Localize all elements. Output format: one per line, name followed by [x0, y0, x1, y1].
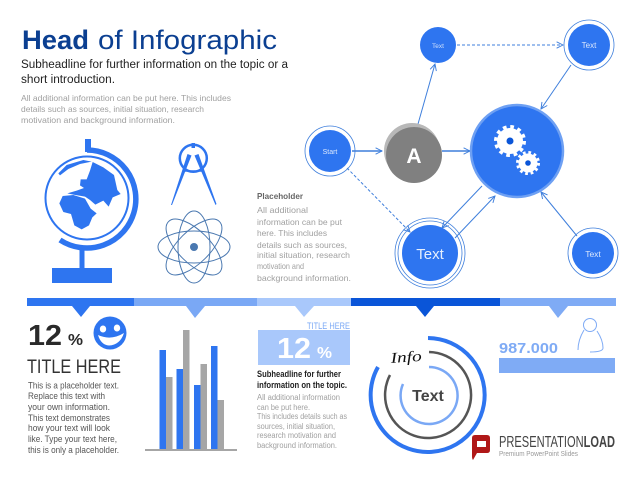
node: big text: Text — [416, 246, 445, 263]
concentric ring chart: Text — [412, 388, 445, 405]
placeholder text block — [257, 191, 351, 283]
intro text block — [21, 93, 231, 125]
title — [22, 25, 277, 55]
placeholder text block: Placeholder — [257, 191, 304, 201]
node: start: Start — [323, 149, 337, 156]
node: bottom right text: Text — [585, 249, 601, 259]
node: top text: Text — [432, 43, 444, 50]
additional information text: can be put here. — [257, 403, 310, 412]
node: gears — [471, 105, 563, 197]
node: top right text: Text — [582, 41, 597, 50]
node: top text — [420, 27, 456, 63]
placeholder body text: This text demonstrates — [28, 413, 110, 424]
logo tagline: Premium PowerPoint Slides — [499, 451, 578, 458]
title: Head — [22, 25, 89, 55]
placeholder body text: This is a placeholder text. — [28, 380, 119, 392]
handwritten label: info: Info — [389, 349, 423, 367]
node: A: A — [406, 145, 422, 168]
logo: presentationload — [472, 434, 615, 460]
concentric ring chart — [371, 338, 485, 452]
intro text block: motivation and background information. — [21, 115, 175, 125]
node: A — [384, 123, 442, 183]
subheadline: further information: Subheadline for further — [257, 369, 341, 379]
arrows — [347, 45, 577, 238]
placeholder text block: motivation and — [257, 261, 304, 271]
segmented divider bar — [27, 298, 616, 318]
placeholder body text — [28, 380, 119, 456]
additional information text — [257, 393, 347, 450]
heading: title here (light): TITLE HERE — [307, 321, 350, 332]
stat: 987.000: 987.000 — [499, 340, 558, 357]
placeholder text block: details such as sources, — [257, 240, 347, 250]
stat panel: 12 percent: 12 — [277, 333, 311, 365]
placeholder text block: information can be put — [257, 217, 343, 227]
title: of Infographic — [98, 25, 277, 55]
placeholder body text: Replace this text with — [28, 391, 105, 402]
placeholder text block: background information. — [257, 273, 351, 283]
placeholder body text: your own information. — [28, 402, 110, 413]
placeholder body text: how your text will look — [28, 423, 110, 434]
node: start — [305, 126, 355, 176]
node: big text — [395, 218, 465, 288]
additional information text: background information. — [257, 441, 337, 450]
stat: 12 percent — [28, 320, 83, 352]
icon: globe — [46, 139, 136, 283]
heading: title here: TITLE HERE — [27, 357, 121, 378]
additional information text: This includes details such as — [257, 412, 347, 421]
additional information text: research motivation and — [257, 431, 336, 440]
subheadline: further information — [257, 369, 347, 390]
placeholder text block: here. This includes — [257, 228, 327, 238]
logo mark — [472, 435, 490, 460]
intro text block: details such as sources, initial situation, research — [21, 104, 204, 114]
icon: person outline — [578, 318, 603, 352]
placeholder text block: All additional — [257, 205, 308, 215]
logo wordmark: PRESENTATIONLOAD — [499, 434, 615, 451]
subheadline: Subheadline for further information on the topic or a — [21, 59, 289, 71]
icon: smiley — [94, 316, 126, 350]
stat panel: 12 percent — [258, 330, 350, 365]
stat: 12 percent: 12 — [28, 320, 62, 352]
subheadline: short introduction. — [21, 74, 115, 86]
value bar — [499, 358, 615, 373]
placeholder body text: like. Type your text here, — [28, 434, 117, 445]
additional information text: All additional information — [257, 393, 340, 402]
node: top right text — [564, 20, 614, 70]
icon: compass — [171, 143, 216, 205]
placeholder body text: this is only a placeholder. — [28, 445, 119, 456]
placeholder text block: initial situation, research — [257, 250, 350, 260]
stat: 12 percent: % — [68, 332, 83, 349]
subheadline: further information: information on the topic. — [257, 380, 347, 390]
intro text block: All additional information can be put here. This includes — [21, 93, 231, 103]
stat panel: 12 percent: % — [317, 345, 332, 362]
icon: atom — [157, 210, 231, 284]
subheadline — [21, 59, 289, 86]
node: bottom right text — [568, 228, 618, 278]
bar chart — [145, 330, 237, 451]
additional information text: sources, initial situation, — [257, 422, 335, 431]
network diagram — [305, 20, 618, 288]
